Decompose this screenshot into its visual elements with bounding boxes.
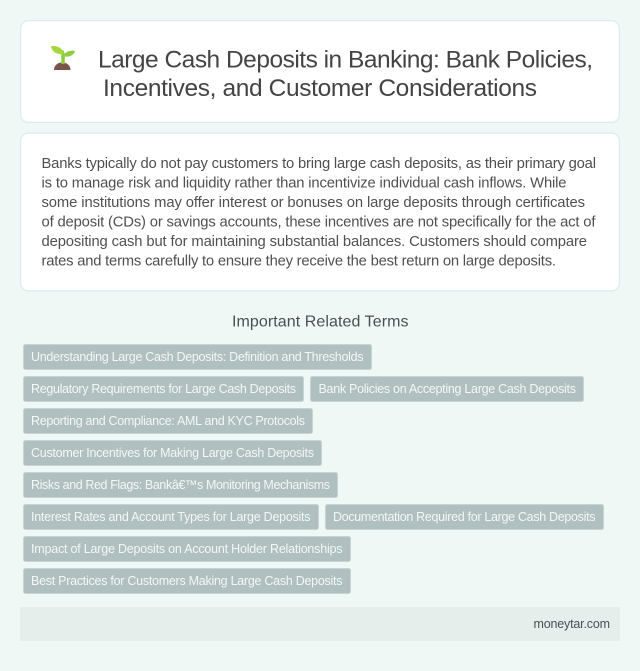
tag: documentation: Documentation Required for Large Cash Deposits xyxy=(333,510,596,524)
tag: understanding xyxy=(24,344,372,370)
tag: reporting and compliance xyxy=(24,408,312,434)
text block: summary: rates and terms carefully to ensure they receive the best return on large deposits. xyxy=(42,254,556,270)
panel: summary paragraph xyxy=(21,133,619,291)
tag: regulatory requirements: Regulatory Requirements for Large Cash Deposits xyxy=(31,382,296,396)
tag: impact of large deposits xyxy=(24,536,350,562)
text block: summary xyxy=(42,156,596,270)
icon: seedling xyxy=(51,46,75,70)
tag: interest rates xyxy=(24,504,318,530)
text block: summary: is to manage risk and liquidity rather than incentivize individual cash inflows. While xyxy=(42,176,566,192)
panel: title card xyxy=(21,21,619,122)
tag: best practices: Best Practices for Customers Making Large Cash Deposits xyxy=(31,574,342,588)
tag: customer incentives: Customer Incentives for Making Large Cash Deposits xyxy=(31,446,314,460)
tag: understanding: Understanding Large Cash Deposits: Definition and Thresholds xyxy=(31,350,364,364)
tag: risks and red flags xyxy=(24,472,338,498)
tag: risks and red flags: Risks and Red Flags: Bankâ€™s Monitoring Mechanisms xyxy=(31,478,330,492)
tag list: related terms xyxy=(24,344,604,594)
heading: important related terms: Important Related Terms xyxy=(232,314,408,330)
tag: best practices xyxy=(24,568,350,594)
title: Large Cash Deposits in Banking: Bank Policies, xyxy=(98,46,593,74)
tag: bank policies xyxy=(310,376,584,402)
tag: interest rates: Interest Rates and Account Types for Large Deposits xyxy=(31,510,310,524)
tag: documentation xyxy=(326,504,604,530)
text block: summary: of deposit (CDs) or savings accounts, these incentives are not specifically for the act of xyxy=(42,214,596,230)
tag: reporting and compliance: Reporting and Compliance: AML and KYC Protocols xyxy=(31,414,305,428)
tag: bank policies: Bank Policies on Accepting Large Cash Deposits xyxy=(318,382,576,396)
tag: impact of large deposits: Impact of Large Deposits on Account Holder Relationships xyxy=(31,542,342,556)
text block: summary: some institutions may offer interest or bonuses on large deposits through certificates xyxy=(42,195,585,211)
title: Incentives, and Customer Considerations xyxy=(103,75,537,102)
footer source text: moneytar.com xyxy=(534,617,610,631)
title xyxy=(98,46,593,102)
text block: summary: depositing cash but for maintaining substantial balances. Customers should compare xyxy=(42,234,587,250)
tag: regulatory requirements xyxy=(24,376,304,402)
text block: summary: Banks typically do not pay customers to bring large cash deposits, as their primary goal xyxy=(42,156,596,172)
tag: customer incentives xyxy=(24,440,322,466)
footer bar xyxy=(20,607,620,641)
